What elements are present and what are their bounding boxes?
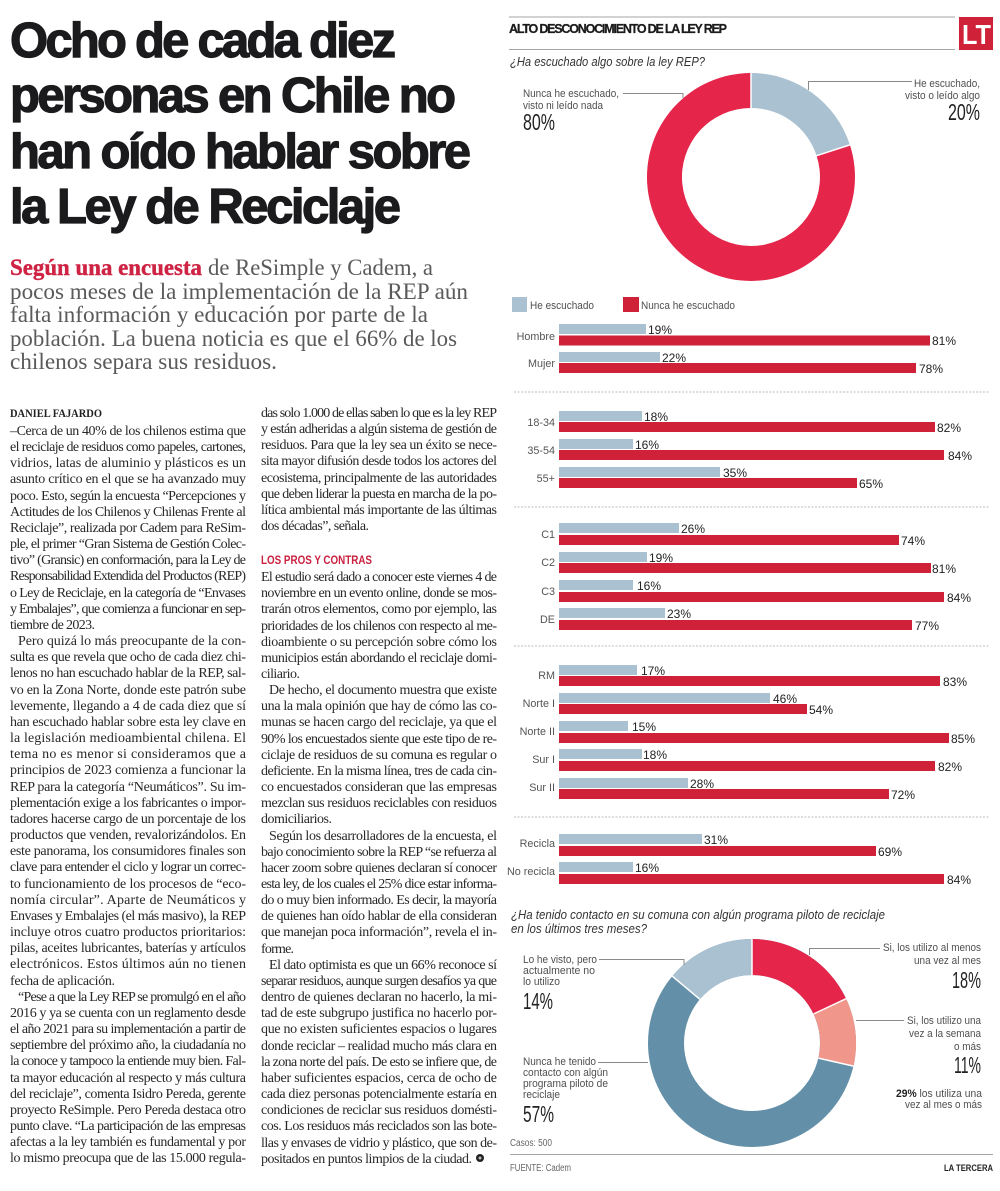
article text: column 2 bottom: municipios están abordando el reciclaje domi- <box>261 651 497 666</box>
article text: column 1: tiembre de 2023. <box>10 618 95 633</box>
article text: column 2 bottom: separar residuos, aunque surgen desafíos ya que <box>261 974 497 989</box>
article text: column 1: vo en la Zona Norte, donde este patrón sube <box>10 683 246 698</box>
bars: Hombre: 19% <box>648 323 672 337</box>
bars: C1: 74% <box>901 534 925 548</box>
bars: Norte II: Norte II <box>520 726 555 738</box>
article text: column 1: tivo” (Gransic) en conformación, para la Ley de <box>10 553 246 568</box>
article text: column 1: ple, el primer “Gran Sistema de Gestión Colec- <box>10 537 246 552</box>
bar chart: recycling habit <box>507 833 971 887</box>
bars: 18-34: 82% <box>937 421 961 435</box>
bars: Sur I: 82% <box>938 760 962 774</box>
bars: C2: 19% <box>649 551 673 565</box>
bars: C1: C1 <box>541 529 555 541</box>
bars: Hombre: 81% <box>932 334 956 348</box>
article text: column 2 bottom: positados en puntos limpios de la ciudad. <box>261 1152 472 1167</box>
article text: column 2 bottom: mezclan sus residuos reciclables con residuos <box>261 796 497 811</box>
bars: 55+ <box>537 466 883 491</box>
bars: RM: 17% <box>641 664 665 678</box>
callout: 57%: reciclaje <box>523 1089 560 1101</box>
article text: column 2 top: lítica ambiental más importante de las últimas <box>261 503 497 518</box>
article text: column 1: Responsabilidad Extendida del Productos (REP) <box>10 569 246 584</box>
bars: Hombre: Hombre <box>517 331 555 343</box>
article text: column 1: productos que venden, revalorizándolos. En <box>10 828 246 843</box>
bars: No recicla: No recicla <box>507 866 555 878</box>
article text: column 1: principios de 2023 comienza a funcionar la <box>10 763 247 778</box>
question 2 <box>511 908 885 936</box>
note: 29%: vez al mes o más <box>905 1099 982 1111</box>
callout: 18% <box>810 942 981 993</box>
callout: he escuchado 20% <box>808 78 980 125</box>
article text: column 2 bottom: que manejan poca información”, revela el in- <box>261 925 497 940</box>
callout: 18%: una vez al mes <box>914 955 981 967</box>
article text: column 2 bottom: 90% los encuestados siente que este tipo de re- <box>261 732 497 747</box>
title <box>10 14 471 234</box>
article text: column 1: del reciclaje”, comenta Isidro Pereda, gerente <box>10 1087 246 1102</box>
article text: column 2 top: y están adheridas a algún sistema de gestión de <box>261 422 497 437</box>
article text: column 2 bottom: de quienes han oído hablar de ella consideran <box>261 909 497 924</box>
title: han oído hablar sobre <box>10 125 471 179</box>
bars: C3: 16% <box>637 579 661 593</box>
callout: he escuchado 20%: 20% <box>948 99 980 125</box>
article text: column 1: punto clave. “La participación de las empresas <box>10 1119 246 1134</box>
article text: column 1: o Ley de Reciclaje, en la categoría de “Envases <box>10 586 246 601</box>
bars: 35-54: 84% <box>948 449 972 463</box>
article text: column 2 bottom <box>261 570 498 1167</box>
bar chart: age <box>527 410 972 491</box>
article text: column 1 <box>9 424 247 1166</box>
note: 29%: 29% los utiliza una <box>896 1088 983 1100</box>
article text: column 2 bottom: hacer zoom sobre quienes declaran sí conocer <box>261 861 497 876</box>
bars: Norte I: 54% <box>809 703 833 717</box>
article text: column 1: Reciclaje”, realizada por Cadem para ReSim- <box>10 521 246 536</box>
article text: column 1: “Pese a que la Ley REP se promulgó en el año <box>18 990 246 1005</box>
bars: C3: 84% <box>947 591 971 605</box>
callout: he escuchado 20%: He escuchado, <box>914 78 980 90</box>
article text: column 1: fecha de aplicación. <box>10 974 115 989</box>
article text: column 2 top: que deben liderar la puesta en marcha de la po- <box>261 487 497 502</box>
question 2: en los últimos tres meses? <box>511 922 647 936</box>
legend: He escuchado <box>530 300 594 312</box>
callout: 57%: Nunca he tenido <box>523 1056 596 1068</box>
logo: LT: LT <box>962 19 991 50</box>
article text: column 2 bottom: deficiente. En la misma línea, tres de cada cin- <box>261 764 497 779</box>
article text: column 1: –Cerca de un 40% de los chilenos estima que <box>9 424 246 439</box>
callout: 57% <box>523 1056 648 1127</box>
article text: column 2 bottom: dentro de quienes declaran no hacerlo, la mi- <box>261 990 497 1005</box>
source footer <box>510 1154 993 1174</box>
donut chart: heard of the REP law <box>647 73 855 281</box>
question 2: ¿Ha tenido contacto en su comuna con algún programa piloto de reciclaje <box>511 908 885 922</box>
callout: 11%: vez a la semana <box>909 1028 982 1040</box>
article text: column 2 bottom: tad de este subgrupo justifica no hacerlo por- <box>261 1006 497 1021</box>
callout: nunca he escuchado 80%: visto ni leído nada <box>523 100 604 112</box>
bars: Sur I: 18% <box>643 748 667 762</box>
bars: 35-54 <box>527 438 972 463</box>
source footer: FUENTE: Cadem <box>510 1163 571 1174</box>
article text: column 2 bottom: ciclaje de residuos de su comuna es regular o <box>261 748 497 763</box>
bars: C2 <box>541 551 956 576</box>
bars: RM: RM <box>538 670 555 682</box>
bars: 35-54: 16% <box>635 438 659 452</box>
bars: 55+: 55+ <box>537 473 555 485</box>
article text: column 2 bottom: Según los desarrolladores de la encuesta, el <box>269 829 497 844</box>
legend: Nunca he escuchado <box>641 300 735 312</box>
subtitle deck: pocos meses de la implementación de la REP aún <box>10 279 468 304</box>
bars: Norte I <box>523 692 833 717</box>
article text: column 1: tema no es menor si consideramos que a <box>10 747 247 762</box>
callout: 11% <box>856 1015 982 1078</box>
article text: column 1: asunto crítico en el que se ha avanzado muy <box>10 472 246 487</box>
article text: column 2 top: dos décadas”, señala. <box>261 519 369 534</box>
note: 29% <box>896 1088 983 1111</box>
bars: Mujer: Mujer <box>528 358 555 370</box>
article text: column 1: la legislación medioambiental chilena. El <box>10 731 246 746</box>
article text: column 1: to funcionamiento de los procesos de “eco- <box>10 877 246 892</box>
bars: C2: 81% <box>932 562 956 576</box>
article text: column 1: sulta es que revela que ocho de cada diez chi- <box>10 650 246 665</box>
subtitle deck: población. La buena noticia es que el 66% de los <box>10 326 457 351</box>
bars: RM <box>538 664 967 689</box>
bar chart: socioeconomic group <box>540 522 971 633</box>
bars: No recicla: 84% <box>947 873 971 887</box>
bars: 55+: 65% <box>859 477 883 491</box>
callout: 14%: actualmente no <box>523 965 595 977</box>
article text: column 1: Actitudes de los Chilenos y Chilenas Frente al <box>10 505 246 520</box>
title: la Ley de Reciclaje <box>10 180 401 234</box>
bars: Sur II: Sur II <box>529 782 555 794</box>
bars: Norte II <box>520 720 975 746</box>
article text: column 2 bottom: El dato optimista es que un 66% reconoce sí <box>269 958 497 973</box>
article text: column 1: y Embalajes”, que comienza a funcionar en sep- <box>10 602 246 617</box>
bars: Sur I: Sur I <box>532 754 555 766</box>
bars: Mujer: 78% <box>919 362 943 376</box>
title: personas en Chile no <box>10 69 456 123</box>
callout: 11%: 11% <box>954 1052 981 1078</box>
bars: C1: 26% <box>681 522 705 536</box>
article text: column 1: tadores hacerse cargo de un porcentaje de los <box>10 812 246 827</box>
article text: column 1: el reciclaje de residuos como papeles, cartones, <box>10 440 246 455</box>
byline: DANIEL FAJARDO <box>10 406 102 420</box>
article text: column 1: plementación exige a los fabricantes o impor- <box>10 796 246 811</box>
bars: 18-34: 18-34 <box>527 417 555 429</box>
callout: 57%: 57% <box>523 1101 554 1127</box>
bars: Recicla: 31% <box>704 833 728 847</box>
callout: 11%: o más <box>954 1041 981 1053</box>
article text: column 2 bottom: bajo conocimiento sobre la REP “se refuerza al <box>261 845 497 860</box>
article text: column 2 top <box>261 406 497 534</box>
callout: 57%: contacto con algún <box>523 1067 608 1079</box>
article text: column 2 bottom: que no existen suficientes espacios o lugares <box>261 1022 497 1037</box>
callout: 14%: lo utilizo <box>523 976 560 988</box>
bars: DE: 23% <box>667 607 691 621</box>
bars: 35-54: 35-54 <box>527 445 555 457</box>
article text: column 1: este panorama, los consumidores finales son <box>10 844 246 859</box>
bars: Norte II: 15% <box>632 720 656 734</box>
article text: column 1: lenos no han escuchado hablar de la REP, sal- <box>10 666 246 681</box>
bars: Mujer: 22% <box>662 351 686 365</box>
article text: column 2 bottom: ciliario. <box>261 667 300 682</box>
bars: Sur I <box>532 748 962 774</box>
callout: nunca he escuchado 80% <box>523 88 683 135</box>
article text: column 2 top: das solo 1.000 de ellas saben lo que es la ley REP <box>261 406 497 421</box>
bars: C3: C3 <box>541 586 555 598</box>
title: Ocho de cada diez <box>10 14 396 68</box>
article text: column 1: la conoce y tampoco la entiende muy bien. Fal- <box>10 1054 246 1069</box>
bars: Recicla: 69% <box>878 845 902 859</box>
bars: Sur II <box>529 777 915 802</box>
bars: 18-34 <box>527 410 961 435</box>
article text: column 2 bottom: cos. Los residuos más reciclados son las bote- <box>261 1119 497 1134</box>
article text: column 2 bottom: do o muy bien informado. Es decir, la mayoría <box>261 893 498 908</box>
article text: column 1: Pero quizá lo más preocupante de la con- <box>18 634 246 649</box>
callout: nunca he escuchado 80%: Nunca he escuchado, <box>523 88 619 100</box>
article text: column 2 bottom: haber suficientes espacios, cerca de ocho de <box>261 1071 497 1086</box>
callout: nunca he escuchado 80%: 80% <box>523 109 555 135</box>
subtitle deck: de ReSimple y Cadem, a <box>208 255 433 280</box>
article text: column 1: proyecto ReSimple. Pero Pereda destaca otro <box>10 1103 246 1118</box>
article text: column 1: pilas, aceites lubricantes, baterías y artículos <box>10 941 246 956</box>
article text: column 1: Envases y Embalajes (el más masivo), la REP <box>10 909 246 924</box>
bars: 55+: 35% <box>723 466 747 480</box>
question 1: ¿Ha escuchado algo sobre la ley REP? <box>510 55 705 69</box>
article text: column 2 bottom: esta ley, de los cuales el 25% dice estar informa- <box>261 877 497 892</box>
article text: column 2 bottom: una la mala opinión que hay de cómo las co- <box>261 699 497 714</box>
bars: Recicla: Recicla <box>520 838 555 850</box>
bars: Hombre <box>517 323 956 348</box>
bars: C2: C2 <box>541 557 555 569</box>
bars: Norte II: 85% <box>951 732 975 746</box>
article text: column 1: ta mayor educación al respecto y más cultura <box>10 1071 247 1086</box>
donut chart: contact with pilot programme <box>666 939 856 1129</box>
callout: 18%: 18% <box>952 967 981 993</box>
article text: column 2 bottom: trarán otros elementos, como por ejemplo, las <box>261 602 497 617</box>
article text: column 2 bottom: El estudio será dado a conocer este viernes 4 de <box>261 570 497 585</box>
icon: end-of-article mark <box>476 1154 484 1162</box>
article text: column 2 bottom: co encuestados consideran que las empresas <box>261 780 497 795</box>
article text: column 1: septiembre del próximo año, la ciudadanía no <box>10 1038 246 1053</box>
bars: Sur II: 28% <box>690 777 714 791</box>
subheading: los pros y contras: LOS PROS Y CONTRAS <box>261 553 372 567</box>
bars: Recicla <box>520 833 902 859</box>
legend <box>512 297 735 312</box>
subtitle deck: falta información y educación por parte de la <box>10 302 428 327</box>
bars: No recicla <box>507 861 971 887</box>
callout: 18%: Si, los utilizo al menos <box>883 942 981 954</box>
bars: Norte I: 46% <box>773 692 797 706</box>
article text: column 1: han escuchado hablar sobre esta ley clave en <box>10 715 246 730</box>
article text: column 1: electrónicos. Estos últimos aún no tienen <box>10 957 246 972</box>
bars: C3 <box>541 579 971 605</box>
article text: column 2 top: sita mayor difusión desde todos los actores del <box>261 454 497 469</box>
article text: column 2 bottom: De hecho, el documento muestra que existe <box>269 683 497 698</box>
bars: RM: 83% <box>943 675 967 689</box>
bars: DE: 77% <box>915 619 939 633</box>
bars: DE: DE <box>540 614 555 626</box>
article text: column 2 bottom: forme. <box>261 942 294 957</box>
callout: 14%: 14% <box>523 988 553 1014</box>
panel heading: alto desconocimiento: ALTO DESCONOCIMIENTO DE LA LEY REP <box>509 22 727 36</box>
article text: column 2 bottom: llas y envases de vidrio y plástico, que son de- <box>261 1136 497 1151</box>
article text: column 1: clave para entender el ciclo y lograr un correc- <box>10 860 246 875</box>
bars: C1 <box>541 522 925 548</box>
article text: column 2 bottom: noviembre en un evento online, donde se mos- <box>261 586 497 601</box>
article text: column 2 bottom: domiciliarios. <box>261 812 332 827</box>
article text: column 1: levemente, llegando a 4 de cada diez que sí <box>10 699 246 714</box>
article text: column 1: 2016 y ya se cuenta con un reglamento desde <box>10 1006 246 1021</box>
article text: column 2 bottom: donde reciclar – realidad mucho más clara en <box>261 1039 497 1054</box>
article text: column 2 bottom: la zona norte del país. De esto se infiere que, de <box>261 1055 497 1070</box>
subtitle deck <box>10 255 468 374</box>
bars: Sur II: 72% <box>891 788 915 802</box>
callout: 57%: programa piloto de <box>523 1078 608 1090</box>
article text: column 2 bottom: munas se hacen cargo del reciclaje, ya que el <box>261 715 497 730</box>
article text: column 2 bottom: prioridades de los chilenos con respecto al me- <box>261 619 497 634</box>
article text: column 1: REP para la categoría “Neumáticos”. Su im- <box>10 780 246 795</box>
subtitle deck: Según una encuesta <box>10 255 202 280</box>
article text: column 1: poco. Esto, según la encuesta “Percepciones y <box>10 489 246 504</box>
article text: column 1: vidrios, latas de aluminio y plásticos es un <box>10 456 246 471</box>
bar chart: gender <box>517 323 956 376</box>
bars: No recicla: 16% <box>635 861 659 875</box>
article text: column 1: incluye otros cuatro productos prioritarios: <box>10 925 246 940</box>
sample size note: Casos: 500 <box>510 1138 552 1149</box>
bars: 18-34: 18% <box>644 410 668 424</box>
article text: column 1: nomía circular”. Aparte de Neumáticos y <box>10 893 246 908</box>
article text: column 2 top: residuos. Para que la ley sea un éxito se nece- <box>261 438 497 453</box>
bars: DE <box>540 607 939 633</box>
article text: column 1: el año 2021 para su implementación a partir de <box>10 1022 246 1037</box>
article text: column 1: lo mismo preocupa que de las 15.000 regula- <box>10 1151 246 1166</box>
callout: 14% <box>523 954 684 1014</box>
bar chart: region <box>520 664 975 802</box>
article text: column 2 bottom: condiciones de reciclar sus residuos domésti- <box>261 1103 497 1118</box>
bars: Mujer <box>528 351 943 376</box>
article text: column 2 top: ecosistema, principalmente de las autoridades <box>261 471 497 486</box>
article text: column 2 bottom: dioambiente o su percepción sobre cómo los <box>261 635 497 650</box>
callout: he escuchado 20%: visto o leído algo <box>905 90 980 102</box>
callout: 11%: Si, los utilizo una <box>907 1015 982 1027</box>
subtitle deck: chilenos separa sus residuos. <box>10 349 277 374</box>
article text: column 2 bottom: cada diez personas potencialmente estaría en <box>261 1087 497 1102</box>
callout: 14%: Lo he visto, pero <box>523 954 597 966</box>
bars: Norte I: Norte I <box>523 698 555 710</box>
article text: column 1: afectas a la ley también es fundamental y por <box>10 1135 246 1150</box>
